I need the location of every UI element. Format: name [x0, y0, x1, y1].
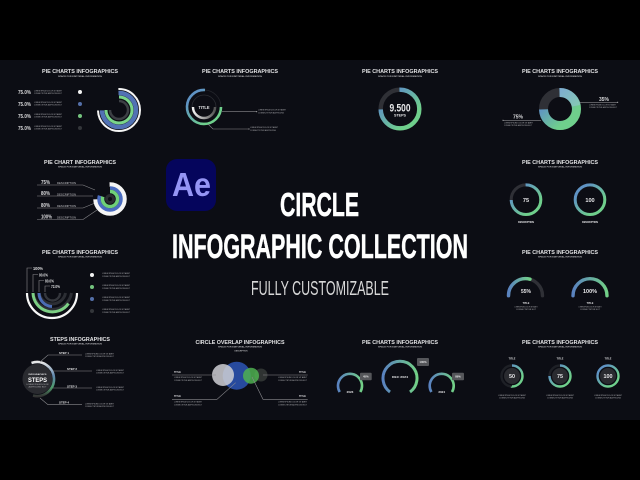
- leader lines: [37, 185, 97, 220]
- half rings: [27, 293, 77, 318]
- legend: CONSECTETUR ADIPISCING ELIT: [102, 275, 131, 278]
- ring 75: TITLE: [557, 358, 564, 360]
- legend: LOREM IPSUM DOLOR SIT AMET: [102, 296, 131, 299]
- arc Dec 2024: [383, 358, 429, 392]
- arc 2023: 45%: [363, 375, 369, 379]
- tagline: FULLY CUSTOMIZABLE: [251, 278, 389, 300]
- ring 100: [594, 358, 623, 400]
- ring label: TITLE: [198, 105, 210, 110]
- heading: PIE CHARTS INFOGRAPHICS: [522, 340, 598, 346]
- overlap circles: [212, 362, 268, 390]
- step 2: CONSECTETUR ADIPISCING ELIT: [96, 372, 125, 374]
- main title: [172, 186, 468, 266]
- ring 75: [511, 185, 541, 224]
- steps circle: [22, 362, 54, 396]
- subheading: SPACE FOR EDITORIAL INFORMATION: [58, 342, 102, 346]
- main title: CIRCLE: [280, 186, 359, 223]
- heading: PIE CHARTS INFOGRAPHICS: [522, 69, 598, 75]
- legend: LOREM IPSUM DOLOR SIT AMET: [102, 284, 131, 287]
- ring 50: CONSECTETUR ADIPISCING: [499, 396, 525, 400]
- gauge 100%: 100%: [583, 289, 598, 295]
- ring 75: CONSECTETUR ADIPISCING: [547, 396, 573, 400]
- value rows: 75%: [41, 180, 50, 186]
- half ring labels: 90.0%: [39, 272, 48, 278]
- subheading: SPACE FOR EDITORIAL INFORMATION: [538, 166, 582, 168]
- callout 75%: [502, 114, 541, 127]
- gauge 55%: [508, 279, 542, 311]
- callout left top: TITLE: [174, 370, 181, 374]
- step 4: STEP 4: [59, 400, 69, 404]
- arc Dec 2024: 100%: [419, 360, 427, 364]
- panel: half ring chart: [27, 250, 131, 318]
- gauge value: 9.500: [390, 102, 410, 114]
- heading: PIE CHART INFOGRAPHICS: [44, 160, 116, 166]
- value list: 75.0%: [18, 90, 31, 96]
- subheading: SPACE FOR EDITORIAL INFORMATION: [58, 75, 102, 78]
- ring 75: [546, 358, 575, 400]
- subheading: SPACE FOR EDITORIAL INFORMATION: [538, 75, 582, 78]
- donut chart: [544, 92, 576, 126]
- panel: pie chart left middle: [37, 160, 124, 220]
- legend: [90, 272, 131, 314]
- value list: LOREM IPSUM DOLOR SIT AMET: [34, 101, 63, 104]
- half ring labels: 72.0%: [51, 284, 60, 289]
- main title: INFOGRAPHIC COLLECTION: [172, 228, 468, 266]
- subheading: SPACE FOR EDITORIAL INFORMATION: [58, 256, 102, 258]
- legend: CONSECTETUR ADIPISCING ELIT: [102, 287, 131, 290]
- gauge 100%: CONSECTETUR ELIT: [580, 309, 601, 311]
- subheading: SPACE FOR EDITORIAL INFORMATION: [378, 75, 422, 78]
- callout left bottom: CONSECTETUR ADIPISCING ELIT: [174, 404, 203, 406]
- ring 100: CONSECTETUR ADIPISCING: [595, 396, 621, 400]
- panel: circle overlap: [172, 340, 308, 406]
- value list: LOREM IPSUM DOLOR SIT AMET: [34, 90, 63, 92]
- callout left top: [172, 370, 216, 382]
- step 4: LOREM IPSUM DOLOR SIT AMET: [85, 402, 115, 406]
- arc 2023: [338, 373, 372, 394]
- dark background: [0, 60, 640, 420]
- callout left top: CONSECTETUR ADIPISCING ELIT: [174, 379, 203, 382]
- value list: CONSECTETUR ADIPISCING ELIT: [34, 128, 63, 130]
- panel: steps ring: [362, 69, 438, 128]
- panel: three disc rings: [498, 340, 623, 400]
- callout 35%: LOREM IPSUM DOLOR SIT AMET: [589, 104, 617, 106]
- value rows: DESCRIPTION: [57, 204, 76, 208]
- subheading: SPACE FOR EDITORIAL INFORMATION: [538, 346, 582, 348]
- callout 75%: CONSECTETUR ADIPISCING ELIT: [504, 124, 533, 127]
- arc 2023: 2023: [347, 390, 354, 394]
- panel: donut with percentages: [502, 69, 618, 127]
- heading: PIE CHARTS INFOGRAPHICS: [42, 69, 118, 75]
- value rows: 80%: [41, 203, 50, 209]
- value rows: DESCRIPTION: [57, 181, 76, 185]
- value list: LOREM IPSUM DOLOR SIT AMET: [34, 125, 63, 128]
- panel: steps infographic: [22, 337, 125, 408]
- step 1: STEP 1: [59, 351, 69, 355]
- ring 50: 50: [509, 374, 515, 380]
- ring 50: [498, 358, 527, 400]
- callout right bottom: TITLE: [299, 394, 306, 398]
- callout 75%: LOREM IPSUM DOLOR SIT AMET: [504, 122, 534, 124]
- heading: CIRCLE OVERLAP INFOGRAPHICS: [196, 340, 285, 346]
- ring 75: 75: [523, 198, 529, 204]
- gauge 55%: 55%: [521, 289, 532, 295]
- subheading: SPACE FOR EDITORIAL INFORMATION: [378, 346, 422, 348]
- gauge 55%: CONSECTETUR ELIT: [516, 309, 537, 311]
- step 2: STEP 2: [67, 367, 77, 371]
- panel: two half gauges: [508, 250, 607, 311]
- value rows: 80%: [41, 191, 50, 197]
- value rows: DESCRIPTION: [57, 192, 76, 196]
- value list: 75.0%: [18, 114, 31, 120]
- panel: circle overlap: DESCRIPTION: [234, 350, 248, 352]
- ring 100: [575, 185, 605, 224]
- gauge 100%: [573, 279, 607, 311]
- callout bottom: CONSECTETUR ADIPISCING: [250, 129, 276, 132]
- panel: title ring chart: [187, 69, 287, 132]
- ring 100: 100: [585, 198, 595, 204]
- callout 35%: CONSECTETUR ADIPISCING ELIT: [589, 106, 618, 109]
- ring 100: 100: [604, 374, 612, 380]
- legend dots: [78, 90, 82, 130]
- heading: PIE CHARTS INFOGRAPHICS: [202, 69, 278, 75]
- icon: After Effects logo: Ae: [172, 166, 211, 203]
- steps circle: INFOGRAPHICS: [28, 373, 47, 376]
- ring 100: LOREM IPSUM DOLOR SIT AMET: [594, 394, 623, 397]
- step 3: [53, 384, 125, 392]
- arc 2024: 2024: [438, 390, 445, 394]
- callout right bottom: CONSECTETUR ADIPISCING ELIT: [278, 404, 308, 406]
- value rows: DESCRIPTION: [57, 216, 76, 220]
- callout 35%: 35%: [599, 97, 610, 103]
- heading: PIE CHARTS INFOGRAPHICS: [362, 340, 438, 346]
- value rows: 100%: [41, 214, 52, 220]
- value list: LOREM IPSUM DOLOR SIT AMET: [34, 113, 63, 116]
- value list: CONSECTETUR ADIPISCING ELIT: [34, 116, 63, 118]
- ring 50: TITLE: [509, 358, 516, 360]
- gauge 100%: TITLE: [587, 302, 594, 305]
- heading: PIE CHARTS INFOGRAPHICS: [522, 160, 598, 166]
- heading: PIE CHARTS INFOGRAPHICS: [42, 250, 118, 256]
- concentric ring chart: [98, 89, 140, 131]
- gauge 55%: TITLE: [523, 302, 530, 305]
- step 4: CONSECTETUR ADIPISCING ELIT: [85, 405, 115, 408]
- legend: LOREM IPSUM DOLOR SIT AMET: [102, 308, 131, 311]
- callout right top: CONSECTETUR ADIPISCING ELIT: [278, 379, 308, 382]
- panel: three arcs: [338, 340, 464, 394]
- steps circle: STEPS: [28, 377, 48, 384]
- gauge caption: STEPS: [394, 114, 406, 118]
- ring 100: DESCRIPTION: [582, 221, 598, 224]
- value list: [18, 90, 63, 132]
- value list: 75.0%: [18, 126, 31, 132]
- callout right top: [263, 370, 308, 382]
- legend: LOREM IPSUM DOLOR SIT AMET: [102, 272, 131, 275]
- ring 75: 75: [557, 374, 563, 380]
- step 1: LOREM IPSUM DOLOR SIT AMET: [85, 352, 115, 356]
- panel: two rings: [511, 160, 605, 224]
- ring 75: LOREM IPSUM DOLOR SIT AMET: [546, 394, 575, 397]
- arc Dec 2024: DEC 2024: [392, 375, 408, 379]
- step 2: LOREM IPSUM DOLOR SIT AMET: [96, 369, 125, 372]
- panel: pie charts top left: [18, 69, 140, 132]
- icon: After Effects logo: [166, 159, 216, 211]
- callout left bottom: LOREM IPSUM DOLOR SIT AMET: [174, 400, 203, 404]
- callout right top: TITLE: [299, 370, 306, 374]
- steps circle: LOREM IPSUM DOLOR: [26, 384, 49, 386]
- callout bottom: LOREM IPSUM DOLOR SIT AMET: [250, 126, 279, 129]
- subheading: SPACE FOR EDITORIAL INFORMATION: [538, 256, 582, 258]
- subheading: SPACE FOR EDITORIAL INFORMATION: [218, 75, 262, 78]
- callout left bottom: TITLE: [174, 394, 181, 398]
- ring 50: LOREM IPSUM DOLOR SIT AMET: [498, 394, 527, 397]
- callout top: [222, 108, 287, 114]
- ring chart: [187, 90, 221, 124]
- step 1: CONSECTETUR ADIPISCING ELIT: [85, 355, 115, 358]
- callout 35%: [580, 97, 618, 109]
- nested ring chart: [96, 184, 124, 214]
- subheading: SPACE FOR EDITORIAL INFORMATION: [58, 166, 102, 168]
- heading: STEPS INFOGRAPHICS: [50, 337, 110, 343]
- ring 100: TITLE: [605, 358, 612, 360]
- step 3: STEP 3: [67, 384, 77, 388]
- step 3: LOREM IPSUM DOLOR SIT AMET: [96, 386, 125, 389]
- value list: 75.0%: [18, 102, 31, 108]
- value rows: [41, 180, 76, 220]
- step 3: CONSECTETUR ADIPISCING ELIT: [96, 388, 125, 392]
- legend: CONSECTETUR ADIPISCING ELIT: [102, 299, 131, 302]
- steps circle: ADIPISCING ELIT: [28, 386, 47, 388]
- subheading: SPACE FOR EDITORIAL INFORMATION: [218, 346, 262, 348]
- value list: CONSECTETUR ADIPISCING ELIT: [34, 104, 63, 106]
- callout right bottom: LOREM IPSUM DOLOR SIT AMET: [278, 400, 308, 404]
- heading: PIE CHARTS INFOGRAPHICS: [362, 69, 438, 75]
- arc 2024: [430, 373, 464, 394]
- callout right top: LOREM IPSUM DOLOR SIT AMET: [278, 376, 308, 379]
- half ring labels: 80.0%: [45, 278, 54, 284]
- value list: CONSECTETUR ADIPISCING ELIT: [34, 92, 63, 95]
- callout left top: LOREM IPSUM DOLOR SIT AMET: [174, 376, 203, 379]
- callout right bottom: [252, 377, 308, 406]
- arc 2024: 89%: [455, 375, 461, 379]
- half ring labels: 100%: [33, 266, 43, 271]
- gauge 55%: LOREM IPSUM DOLOR SIT AMET: [514, 305, 538, 308]
- callout top: CONSECTETUR ADIPISCING: [258, 112, 284, 114]
- step 4: [40, 398, 115, 408]
- legend: CONSECTETUR ADIPISCING ELIT: [102, 311, 131, 314]
- heading: PIE CHARTS INFOGRAPHICS: [522, 250, 598, 256]
- callout bottom: [208, 124, 279, 132]
- gauge 100%: LOREM IPSUM DOLOR SIT AMET: [578, 305, 602, 308]
- step 1: [40, 351, 115, 362]
- callout top: LOREM IPSUM DOLOR SIT AMET: [258, 108, 287, 112]
- callout left bottom: [172, 383, 236, 406]
- step 2: [53, 367, 125, 374]
- callout 75%: 75%: [513, 114, 524, 120]
- donut gauge: [381, 90, 419, 128]
- half ring labels: [27, 266, 60, 292]
- ring 75: DESCRIPTION: [518, 221, 534, 224]
